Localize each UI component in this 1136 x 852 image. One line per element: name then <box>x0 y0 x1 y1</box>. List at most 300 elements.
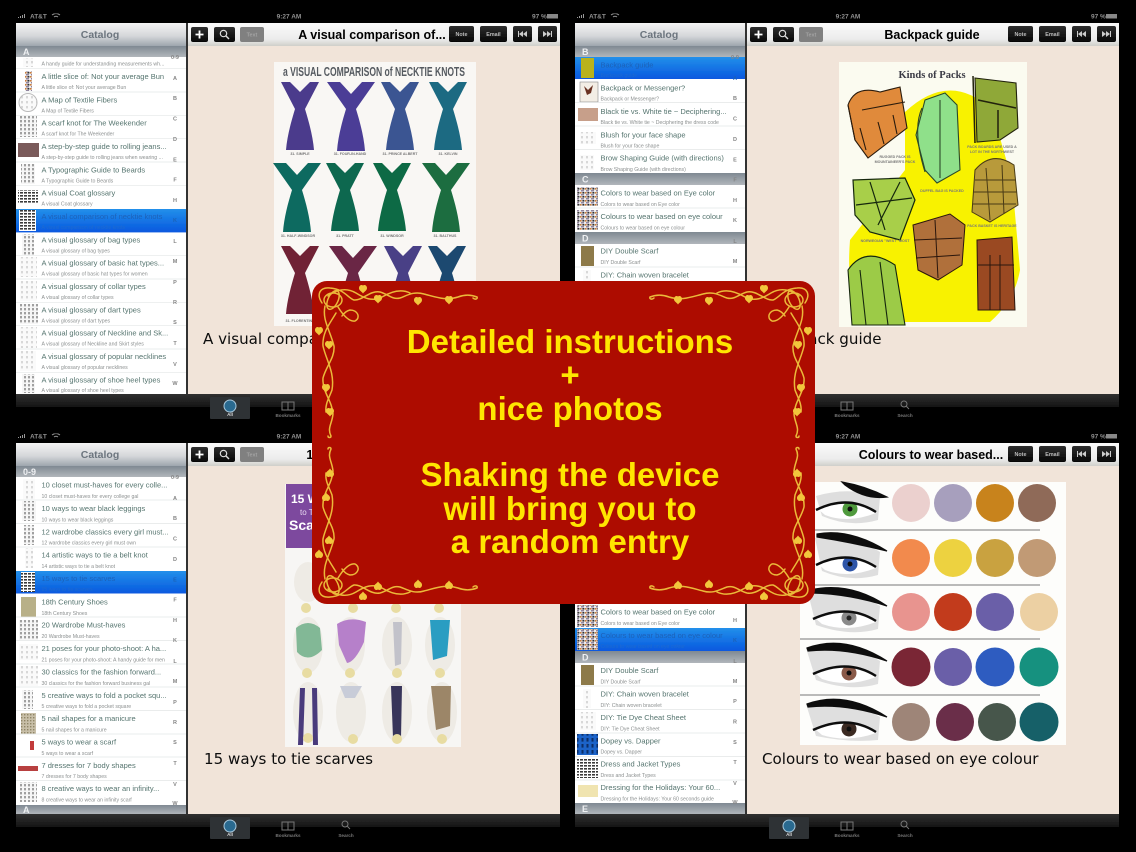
alphabet index: A <box>733 76 737 82</box>
status bar: 9:27 AM <box>836 14 860 20</box>
alphabet index: L <box>733 659 737 665</box>
catalog list: A visual glossary of collar types <box>42 282 146 291</box>
catalog list: Dressing for the Holidays: Your 60 seconds guide <box>600 796 714 802</box>
eye: blue <box>815 533 887 578</box>
catalog list: A visual glossary of collar types <box>42 295 114 301</box>
poster captions: RUGGED PACK IS <box>879 155 911 159</box>
mannequins <box>293 562 457 742</box>
catalog list: A visual comparison of necktie knots <box>42 212 163 221</box>
catalog list <box>575 61 745 280</box>
catalog list: 15 ways to tie scarves <box>42 587 93 593</box>
catalog list: A visual glossary of dart types <box>42 318 111 324</box>
catalog list: A scarf knot for The Weekender <box>42 132 115 138</box>
catalog list: Dress and Jacket Types <box>600 760 681 769</box>
catalog list: Dressing for the Holidays: Your 60... <box>600 783 720 792</box>
catalog list: Blush for your face shape <box>600 130 686 139</box>
catalog list: A Map of Textile Fibers <box>42 108 94 114</box>
poster captions: DUFFEL BAG IS PACKED <box>920 189 964 193</box>
status bar <box>836 434 1117 440</box>
banner text: a random entry <box>451 523 690 560</box>
alphabet index: M <box>173 679 178 685</box>
toolbar: A visual comparison of... <box>298 28 446 42</box>
catalog list <box>16 481 186 804</box>
row 3 ties <box>281 246 466 315</box>
alphabet index: F <box>173 178 177 184</box>
tie labels: 31. HALF-WINDSOR <box>281 234 315 238</box>
catalog list: DIY: Tie Dye Cheat Sheet <box>600 726 660 732</box>
caption: A visual comparison of necktie knots <box>203 330 481 348</box>
orange pack <box>848 87 907 158</box>
poster captions: PACK BASKET IS HERITAGE <box>967 224 1017 228</box>
status bar <box>18 434 301 440</box>
alphabet index: C <box>173 536 177 542</box>
catalog list: 20 Wardrobe Must-haves <box>42 634 100 640</box>
selected row <box>16 571 186 594</box>
catalog list: Brow Shaping Guide (with directions) <box>600 154 724 163</box>
tie labels: 31. KELVIN <box>439 152 458 156</box>
alphabet index: W <box>172 801 178 807</box>
catalog list: DIY Double Scarf <box>600 666 659 675</box>
alphabet index: 0-9 <box>171 475 179 481</box>
alphabet index: A <box>173 496 177 502</box>
catalog list <box>575 608 745 802</box>
toolbar: Note <box>456 32 467 38</box>
alphabet index: C <box>173 116 177 122</box>
tie labels: 31. WINDSOR <box>380 234 404 238</box>
catalog list: A visual glossary of popular necklines <box>42 365 128 371</box>
status bar: AT&T <box>589 14 606 20</box>
alphabet index: 0-9 <box>171 55 179 61</box>
banner text: Shaking the device <box>421 456 719 493</box>
poster captions: MOUNTAINEER'S PACK <box>875 160 916 164</box>
alphabet index: D <box>173 137 177 143</box>
toolbar: Text <box>806 32 817 38</box>
catalog list: 18th Century Shoes <box>42 597 108 606</box>
eye: brown <box>806 643 887 687</box>
catalog header <box>575 23 745 47</box>
alphabet index: C <box>733 116 737 122</box>
ornament: top-left vine <box>315 285 477 438</box>
catalog list: Dopey vs. Dapper <box>600 736 661 745</box>
catalog list: Backpack or Messenger? <box>600 83 685 92</box>
catalog list: 20 Wardrobe Must-haves <box>42 621 126 630</box>
toolbar <box>188 443 560 466</box>
catalog list: A visual glossary of basic hat types... <box>42 259 164 268</box>
alphabet index: L <box>733 239 737 245</box>
frame pack <box>853 178 915 240</box>
row 3 scarves <box>298 686 451 745</box>
alphabet index <box>732 618 738 806</box>
catalog list: 8 creative ways to wear an infinity scarf <box>42 798 132 804</box>
alphabet index: H <box>733 618 737 624</box>
alphabet index: 0-9 <box>731 55 739 61</box>
toolbar: Email <box>1045 32 1060 38</box>
alphabet index: K <box>173 638 177 644</box>
catalog list: A visual glossary of shoe heel types <box>42 375 161 384</box>
swatches row 4 <box>892 648 1058 686</box>
alphabet index: M <box>733 259 738 265</box>
app chrome <box>575 434 1119 839</box>
catalog list: A visual Coat glossary <box>42 189 116 198</box>
alphabet index: L <box>173 239 177 245</box>
catalog list: A visual glossary of popular necklines <box>42 352 166 361</box>
app chrome <box>16 434 560 839</box>
row 2 scarves <box>296 619 450 666</box>
catalog list: 10 ways to wear black leggings <box>42 504 146 513</box>
poster heading block: to Tie <box>300 508 320 517</box>
section band D <box>575 232 745 244</box>
status bar: 9:27 AM <box>836 434 860 440</box>
panel: top-right screen, backpack guide <box>575 14 1119 419</box>
alphabet index: P <box>173 280 177 286</box>
section band A: A <box>23 47 30 57</box>
banner text <box>407 323 733 560</box>
tie labels: 31. FLORENTINE <box>286 319 315 323</box>
catalog list: 21 poses for your photo-shoot: A ha... <box>42 644 166 653</box>
catalog list: 7 dresses for 7 body shapes <box>42 761 136 770</box>
catalog list: 8 creative ways to wear an infinity... <box>42 784 159 793</box>
tab bar: All <box>227 412 233 417</box>
panel: bottom-right screen, eye colours <box>575 434 1119 839</box>
catalog list: A visual glossary of basic hat types for women <box>42 272 148 278</box>
catalog list: 30 classics for the fashion forward... <box>42 667 161 676</box>
tie labels: 31. PRINCE ALBERT <box>382 152 418 156</box>
alphabet index: E <box>173 578 177 584</box>
tab bar: All <box>786 832 792 837</box>
catalog list: Colours to wear based on eye colour <box>600 631 723 640</box>
swatches row 5 <box>892 702 1058 742</box>
alphabet index: T <box>173 761 177 767</box>
tie labels: 31. PRATT <box>336 234 355 238</box>
alphabet index: S <box>733 740 737 746</box>
catalog list: 5 ways to wear a scarf <box>42 751 94 757</box>
callout: red banner <box>312 281 815 604</box>
section band D <box>575 651 745 663</box>
tab bar <box>575 814 1119 839</box>
eye colour chart <box>800 482 1066 745</box>
catalog list: 18th Century Shoes <box>42 611 88 617</box>
status bar <box>18 14 558 20</box>
toolbar <box>747 23 1119 46</box>
alphabet index: M <box>733 679 738 685</box>
tab bar: All <box>786 412 792 417</box>
status bar <box>577 14 1117 20</box>
alphabet index: A <box>173 76 177 82</box>
number badges <box>301 603 447 744</box>
tab bar: Search <box>897 413 913 418</box>
rust pack <box>977 237 1015 310</box>
alphabet index: B <box>173 96 177 102</box>
catalog list: DIY: Tie Dye Cheat Sheet <box>600 713 687 722</box>
section band 0-9 <box>16 466 186 477</box>
catalog list: 5 ways to wear a scarf <box>42 738 117 746</box>
eye: grey <box>808 588 887 632</box>
status bar: AT&T <box>30 14 47 20</box>
catalog list: 14 artistic ways to tie a belt knot <box>42 564 116 570</box>
catalog header <box>575 443 745 467</box>
alphabet index: W <box>172 381 178 387</box>
eye: green <box>816 482 887 523</box>
catalog list: Backpack or Messenger? <box>600 96 659 102</box>
alphabet index <box>171 475 179 807</box>
catalog list: A visual glossary of Neckline and Skirt styles <box>42 342 144 348</box>
catalog list: 15 ways to tie scarves <box>42 574 116 583</box>
alphabet index: T <box>733 760 737 766</box>
row thumbnails <box>18 479 38 802</box>
catalog list: A visual glossary of Neckline and Sk... <box>42 329 168 338</box>
alphabet index: H <box>173 198 177 204</box>
row thumbnails <box>18 58 39 393</box>
catalog list: A visual glossary of dart types <box>42 305 141 314</box>
toolbar: Text <box>247 452 258 458</box>
banner text: nice photos <box>477 390 663 427</box>
section band A <box>16 46 186 57</box>
alphabet index: R <box>733 720 737 726</box>
tab bar <box>16 814 560 839</box>
catalog list: A visual comparison of necktie knots <box>42 225 126 231</box>
catalog list: Brow Shaping Guide (with directions) <box>600 167 686 173</box>
alphabet index: P <box>173 700 177 706</box>
catalog list: Black tie vs. White tie ~ Deciphering the dress code <box>600 120 719 126</box>
catalog list: A scarf knot for The Weekender <box>42 119 147 128</box>
catalog list: 5 creative ways to fold a pocket square <box>42 704 131 710</box>
ornament: bottom-left vine <box>315 448 477 600</box>
catalog list: 5 nail shapes for a manicure <box>42 728 107 734</box>
catalog list: Backpack guide <box>600 73 637 79</box>
section band D: D <box>582 652 589 662</box>
catalog header: Catalog <box>640 29 678 41</box>
status bar: 97 % <box>1091 14 1106 20</box>
catalog list: DIY Double Scarf <box>600 247 659 256</box>
eye: dark <box>806 699 887 741</box>
alphabet index: W <box>732 800 738 806</box>
alphabet index: E <box>733 158 737 164</box>
section band E <box>575 803 745 814</box>
alphabet index: P <box>733 699 737 705</box>
catalog list: Dress and Jacket Types <box>600 773 656 779</box>
row 2 ties <box>273 163 470 232</box>
tab bar <box>16 394 560 419</box>
poster captions: NORWEGIAN "WEST" MOST <box>861 239 910 243</box>
catalog list: 5 creative ways to fold a pocket squ... <box>42 691 167 700</box>
catalog list <box>16 62 186 394</box>
tie labels: 31. FOUR-IN-HAND <box>334 152 367 156</box>
ornament: top-right vine <box>650 285 812 438</box>
tie labels: 31. BALTHUS <box>434 234 457 238</box>
catalog list: Colours to wear based on eye colour <box>600 212 723 221</box>
alphabet index: K <box>173 218 177 224</box>
catalog list: DIY: Chain woven bracelet <box>600 690 690 699</box>
status bar: 9:27 AM <box>277 14 301 20</box>
catalog list: Colors to wear based on Eye color <box>600 202 680 208</box>
tab bar: All <box>227 832 233 837</box>
toolbar: Colours to wear based... <box>859 448 1003 462</box>
lower green pack <box>848 256 905 325</box>
alphabet index: K <box>733 218 737 224</box>
panel: top-left screen, necktie knots <box>16 14 560 419</box>
catalog list: 30 classics for the fashion forward business gal <box>42 681 150 687</box>
toolbar: Email <box>486 32 501 38</box>
toolbar <box>747 443 1119 466</box>
toolbar: Note <box>1015 32 1026 38</box>
caption: 15 ways to tie scarves <box>204 750 373 768</box>
tab bar: Bookmarks <box>834 413 860 418</box>
tab bar: Bookmarks <box>834 833 860 838</box>
alphabet index: R <box>173 300 177 306</box>
alphabet index: H <box>733 198 737 204</box>
alphabet index: V <box>173 782 177 788</box>
alphabet index: L <box>173 659 177 665</box>
tall green pack <box>916 93 960 183</box>
catalog header: Catalog <box>81 449 119 461</box>
tab bar: Bookmarks <box>275 833 301 838</box>
brown pack <box>913 214 965 280</box>
catalog list: Black tie vs. White tie ~ Deciphering... <box>600 107 727 116</box>
poster captions <box>861 145 1017 243</box>
eyes <box>806 482 887 741</box>
catalog list: A Map of Textile Fibers <box>42 95 117 104</box>
catalog list: A visual glossary of bag types <box>42 235 141 244</box>
catalog list: Blush for your face shape <box>600 144 659 150</box>
catalog list: A visual glossary of shoe heel types <box>42 388 124 394</box>
catalog list: 10 closet must-haves for every college gal <box>42 494 138 500</box>
status bar: 9:27 AM <box>277 434 301 440</box>
tab bar: Search <box>897 833 913 838</box>
backpack poster <box>839 62 1027 327</box>
app chrome <box>575 14 1119 419</box>
swatches row 1 <box>892 484 1056 522</box>
section band A bottom <box>16 805 186 815</box>
toolbar: Note <box>1015 452 1026 458</box>
row 1 ties <box>281 82 467 151</box>
catalog header <box>16 443 186 467</box>
backpack poster: Kinds of Packs <box>898 70 966 81</box>
selected row <box>575 57 745 79</box>
alphabet index: D <box>733 137 737 143</box>
catalog list: A visual glossary of bag types <box>42 248 110 254</box>
alphabet index: B <box>733 96 737 102</box>
poster heading block: 15 Ways <box>291 492 339 506</box>
alphabet index: K <box>733 638 737 644</box>
tab bar: Search <box>338 413 354 418</box>
status bar: AT&T <box>30 434 47 440</box>
catalog list: 12 wardrobe classics every girl must own <box>42 540 136 546</box>
catalog list: DIY Double Scarf <box>600 260 641 266</box>
section band 0-9: 0-9 <box>23 467 36 477</box>
catalog list: Colours to wear based on eye colour <box>600 644 685 650</box>
catalog list: DIY Double Scarf <box>600 680 641 686</box>
alphabet index <box>731 55 739 265</box>
catalog list: A step-by-step guide to rolling jeans... <box>42 142 167 151</box>
catalog list: A Typographic Guide to Beards <box>42 178 114 184</box>
alphabet index: S <box>173 320 177 326</box>
catalog list: 10 closet must-haves for every colle... <box>42 481 167 490</box>
alphabet index: S <box>173 740 177 746</box>
catalog list: Colours to wear based on eye colour <box>600 226 685 232</box>
olive pack <box>973 76 1018 143</box>
section band D: D <box>582 234 589 244</box>
alphabet index: R <box>173 720 177 726</box>
app chrome <box>16 14 560 419</box>
basket pack <box>972 159 1018 222</box>
catalog list: 14 artistic ways to tie a belt knot <box>42 551 149 560</box>
alphabet index: M <box>173 259 178 265</box>
banner text: will bring you to <box>443 490 696 527</box>
alphabet index: T <box>173 341 177 347</box>
catalog list: A little slice of: Not your average Bun <box>42 72 164 81</box>
catalog list: DIY: Chain woven bracelet <box>600 703 662 709</box>
catalog list: A visual Coat glossary <box>42 202 93 208</box>
row dividers <box>800 530 1040 695</box>
toolbar: Email <box>1045 452 1060 458</box>
alphabet index: F <box>173 598 177 604</box>
tie labels <box>281 152 458 323</box>
poster captions: PACK BOARDS ARE USED A <box>967 145 1017 149</box>
alphabet index: D <box>173 557 177 563</box>
ornament: bottom-right vine <box>650 448 812 600</box>
swatches row 2 <box>892 539 1056 577</box>
catalog list: DIY: Chain woven bracelet <box>600 271 690 280</box>
necktie knots poster <box>273 62 476 326</box>
catalog list: Dopey vs. Dapper <box>600 750 642 756</box>
tab bar <box>575 394 1119 419</box>
catalog list: 5 nail shapes for a manicure <box>42 714 136 723</box>
selected row <box>16 209 186 232</box>
caption: Backpack guide <box>762 330 882 348</box>
catalog list: A step-by-step guide to rolling jeans when wearing ... <box>42 155 163 161</box>
alphabet index: E <box>173 158 177 164</box>
catalog list: 21 poses for your photo-shoot: A handy guide for men <box>42 658 165 664</box>
tab bar: Bookmarks <box>275 413 301 418</box>
poster captions: LOT IN THE NORTHWEST <box>970 150 1015 154</box>
catalog list: Colors to wear based on Eye color <box>600 608 716 617</box>
catalog list: A handy guide for understanding measurements wh... <box>42 62 164 68</box>
section band B: B <box>582 47 589 57</box>
scarves poster <box>285 484 461 747</box>
tie labels: 31. SIMPLE <box>290 152 310 156</box>
section band B <box>575 46 745 57</box>
catalog list: A Typographic Guide to Beards <box>42 165 145 174</box>
section band A bottom: A <box>23 805 30 815</box>
status bar: 97 % <box>532 14 547 20</box>
alphabet index: V <box>733 781 737 787</box>
selected row <box>575 628 745 651</box>
necktie knots poster: a VISUAL COMPARISON of NECKTIE KNOTS <box>283 64 465 79</box>
poster heading block <box>286 484 358 548</box>
banner text: Detailed instructions <box>407 323 733 360</box>
section band E: E <box>582 804 588 814</box>
toolbar <box>188 23 560 46</box>
alphabet index: V <box>173 362 177 368</box>
toolbar: Text <box>247 32 258 38</box>
row thumbnails <box>577 58 598 282</box>
section band C <box>575 173 745 185</box>
catalog header <box>16 23 186 47</box>
tab bar: Search <box>338 833 354 838</box>
catalog list: 10 ways to wear black leggings <box>42 518 114 524</box>
catalog list: 12 wardrobe classics every girl must... <box>42 527 169 536</box>
alphabet index: F <box>733 178 737 184</box>
caption: Colours to wear based on eye colour <box>762 750 1039 768</box>
catalog list: Colors to wear based on Eye color <box>600 621 680 627</box>
banner text: + <box>560 356 580 393</box>
swatches row 3 <box>892 593 1058 631</box>
catalog header: Catalog <box>640 449 678 461</box>
panel: bottom-left screen, scarves <box>16 434 560 839</box>
toolbar: 15 ways to tie scarves <box>306 448 438 462</box>
section band C: C <box>582 174 589 184</box>
toolbar: Backpack guide <box>884 28 980 42</box>
